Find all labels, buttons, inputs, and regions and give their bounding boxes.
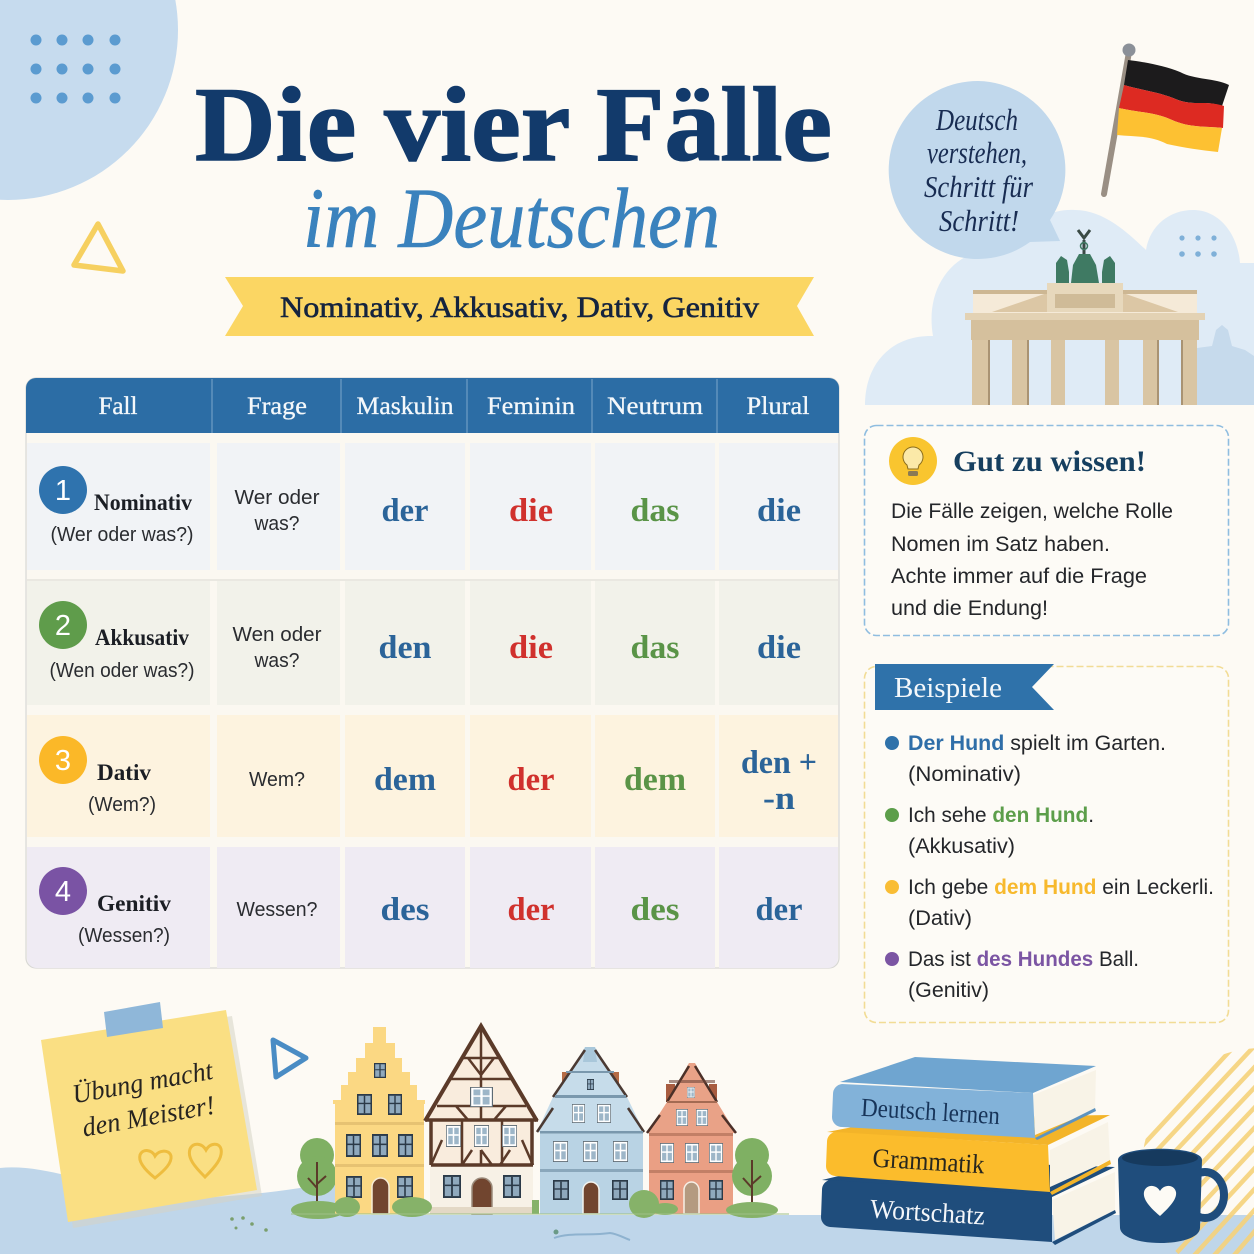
subtitle ribbon xyxy=(225,277,814,336)
row: Genitiv: des xyxy=(380,892,430,928)
row: Dativ: 3 xyxy=(55,745,71,777)
row: Nominativ: das xyxy=(630,493,680,529)
speech bubble: Schritt für xyxy=(924,169,1034,204)
table header: Plural xyxy=(746,393,810,420)
book: Wortschatz xyxy=(821,1160,1116,1245)
blue house xyxy=(537,1047,644,1214)
row: Dativ xyxy=(27,715,838,837)
row: Dativ: dem xyxy=(374,762,436,798)
row: Akkusativ: Wen oder xyxy=(232,623,322,646)
speech bubble: verstehen, xyxy=(927,135,1027,170)
subtitle ribbon: Nominativ, Akkusativ, Dativ, Genitiv xyxy=(280,291,759,324)
sticky note xyxy=(41,1002,262,1228)
example: Nominativ: (Nominativ) xyxy=(908,762,1021,786)
row: Dativ: Dativ xyxy=(97,760,151,785)
row: Dativ: dem xyxy=(624,762,686,798)
row: Nominativ: was? xyxy=(254,512,300,535)
row: Akkusativ: die xyxy=(509,630,553,666)
example: Nominativ xyxy=(885,731,1166,786)
row: Nominativ: der xyxy=(382,493,428,529)
yellow house xyxy=(333,1027,425,1214)
speech bubble: Deutsch xyxy=(935,102,1018,137)
row: Akkusativ: Akkusativ xyxy=(95,625,189,650)
illustration: row of houses xyxy=(291,1026,789,1219)
table header: Maskulin xyxy=(356,393,454,420)
row: Nominativ: (Wer oder was?) xyxy=(50,523,194,546)
icon: German flag xyxy=(1104,44,1229,194)
row: Akkusativ: den xyxy=(378,630,432,666)
row: Akkusativ: (Wen oder was?) xyxy=(50,659,194,682)
table header: Frage xyxy=(247,393,307,420)
row: Genitiv: (Wessen?) xyxy=(78,924,170,947)
illustration: stack of books xyxy=(821,1057,1116,1245)
row: Akkusativ xyxy=(27,581,838,705)
book: Grammatik: Grammatik xyxy=(872,1143,986,1179)
half-timbered house xyxy=(425,1026,538,1214)
table header: Neutrum xyxy=(607,393,704,420)
row: Akkusativ: das xyxy=(630,630,680,666)
icon: light bulb xyxy=(889,437,937,485)
speech bubble xyxy=(889,81,1065,259)
panel: Gut zu wissen: und die Endung! xyxy=(891,596,1048,620)
book: Deutsch lernen xyxy=(832,1057,1096,1140)
title: Die vier Fälle xyxy=(195,66,832,183)
row: Genitiv: 4 xyxy=(55,876,71,908)
row: Nominativ: 1 xyxy=(55,475,71,507)
row: Nominativ xyxy=(27,443,838,570)
heading ribbon: Beispiele xyxy=(894,673,1002,704)
panel: Gut zu wissen: Gut zu wissen! xyxy=(953,445,1146,478)
tree right xyxy=(726,1138,778,1218)
row: Genitiv: Wessen? xyxy=(236,898,318,921)
row: Nominativ: Nominativ xyxy=(94,490,192,515)
panel: Gut zu wissen: Nomen im Satz haben. xyxy=(891,532,1110,556)
tree left xyxy=(291,1138,345,1219)
icon: coffee mug xyxy=(1118,1149,1224,1243)
heading ribbon xyxy=(875,664,1054,710)
panel: Gut zu wissen xyxy=(864,426,1228,636)
example: Dativ: Ich gebe dem Hund ein Leckerli. xyxy=(908,875,1214,899)
example: Genitiv: Das ist des Hundes Ball. xyxy=(908,947,1139,971)
row: Genitiv: des xyxy=(630,892,680,928)
row: Nominativ: die xyxy=(509,493,553,529)
row: Genitiv: der xyxy=(756,892,802,928)
panel: Beispiele xyxy=(864,664,1228,1022)
cloud and Berlin skyline background xyxy=(865,210,1254,405)
row: Dativ: den + xyxy=(741,745,817,781)
row: Dativ: der xyxy=(508,762,554,798)
title: im Deutschen xyxy=(303,170,720,266)
row: Nominativ: die xyxy=(757,493,801,529)
panel: table xyxy=(26,378,839,968)
decorative blob with dots xyxy=(0,0,178,200)
icon: yellow triangle xyxy=(74,224,123,271)
row: Dativ: (Wem?) xyxy=(88,793,156,816)
example: Akkusativ xyxy=(885,803,1094,858)
row: Nominativ: Wer oder xyxy=(234,486,320,509)
book: Wortschatz: Wortschatz xyxy=(869,1194,986,1230)
example: Genitiv xyxy=(885,947,1139,1002)
row: Akkusativ: die xyxy=(757,630,801,666)
icon: hearts xyxy=(140,1144,221,1178)
book: Deutsch lernen: Deutsch lernen xyxy=(860,1093,1001,1130)
icon: blue triangle xyxy=(273,1040,306,1077)
striped circle decoration xyxy=(1144,1048,1254,1254)
panel: Gut zu wissen: Die Fälle zeigen, welche Rolle xyxy=(891,499,1173,523)
example: Genitiv: (Genitiv) xyxy=(908,978,989,1002)
example: Nominativ: Der Hund spielt im Garten. xyxy=(908,731,1166,755)
row: Genitiv: Genitiv xyxy=(97,891,171,916)
table header: Fall xyxy=(98,393,138,420)
table header: Feminin xyxy=(487,393,576,420)
ground speckles xyxy=(230,1216,630,1240)
row: Akkusativ: 2 xyxy=(55,610,71,642)
sticky note: Übung macht xyxy=(70,1055,216,1109)
title xyxy=(195,66,832,266)
sticky note: den Meister! xyxy=(80,1090,217,1143)
illustration: Brandenburg Gate xyxy=(965,230,1205,405)
example: Akkusativ: (Akkusativ) xyxy=(908,834,1015,858)
book: Grammatik xyxy=(826,1115,1111,1195)
row: Akkusativ: was? xyxy=(254,649,300,672)
row: Genitiv xyxy=(27,847,838,968)
row: Genitiv: der xyxy=(508,892,554,928)
salmon house xyxy=(647,1063,736,1214)
example: Dativ xyxy=(885,875,1214,930)
row: Dativ: Wem? xyxy=(249,768,305,791)
table header xyxy=(26,378,839,433)
panel: Gut zu wissen: Achte immer auf die Frage xyxy=(891,564,1147,588)
example: Akkusativ: Ich sehe den Hund. xyxy=(908,803,1094,827)
row: Dativ: -n xyxy=(763,781,795,817)
tape xyxy=(104,1002,163,1037)
example: Dativ: (Dativ) xyxy=(908,906,972,930)
bushes xyxy=(334,1190,678,1218)
ground band xyxy=(0,1167,1254,1254)
speech bubble: Schritt! xyxy=(939,203,1019,238)
